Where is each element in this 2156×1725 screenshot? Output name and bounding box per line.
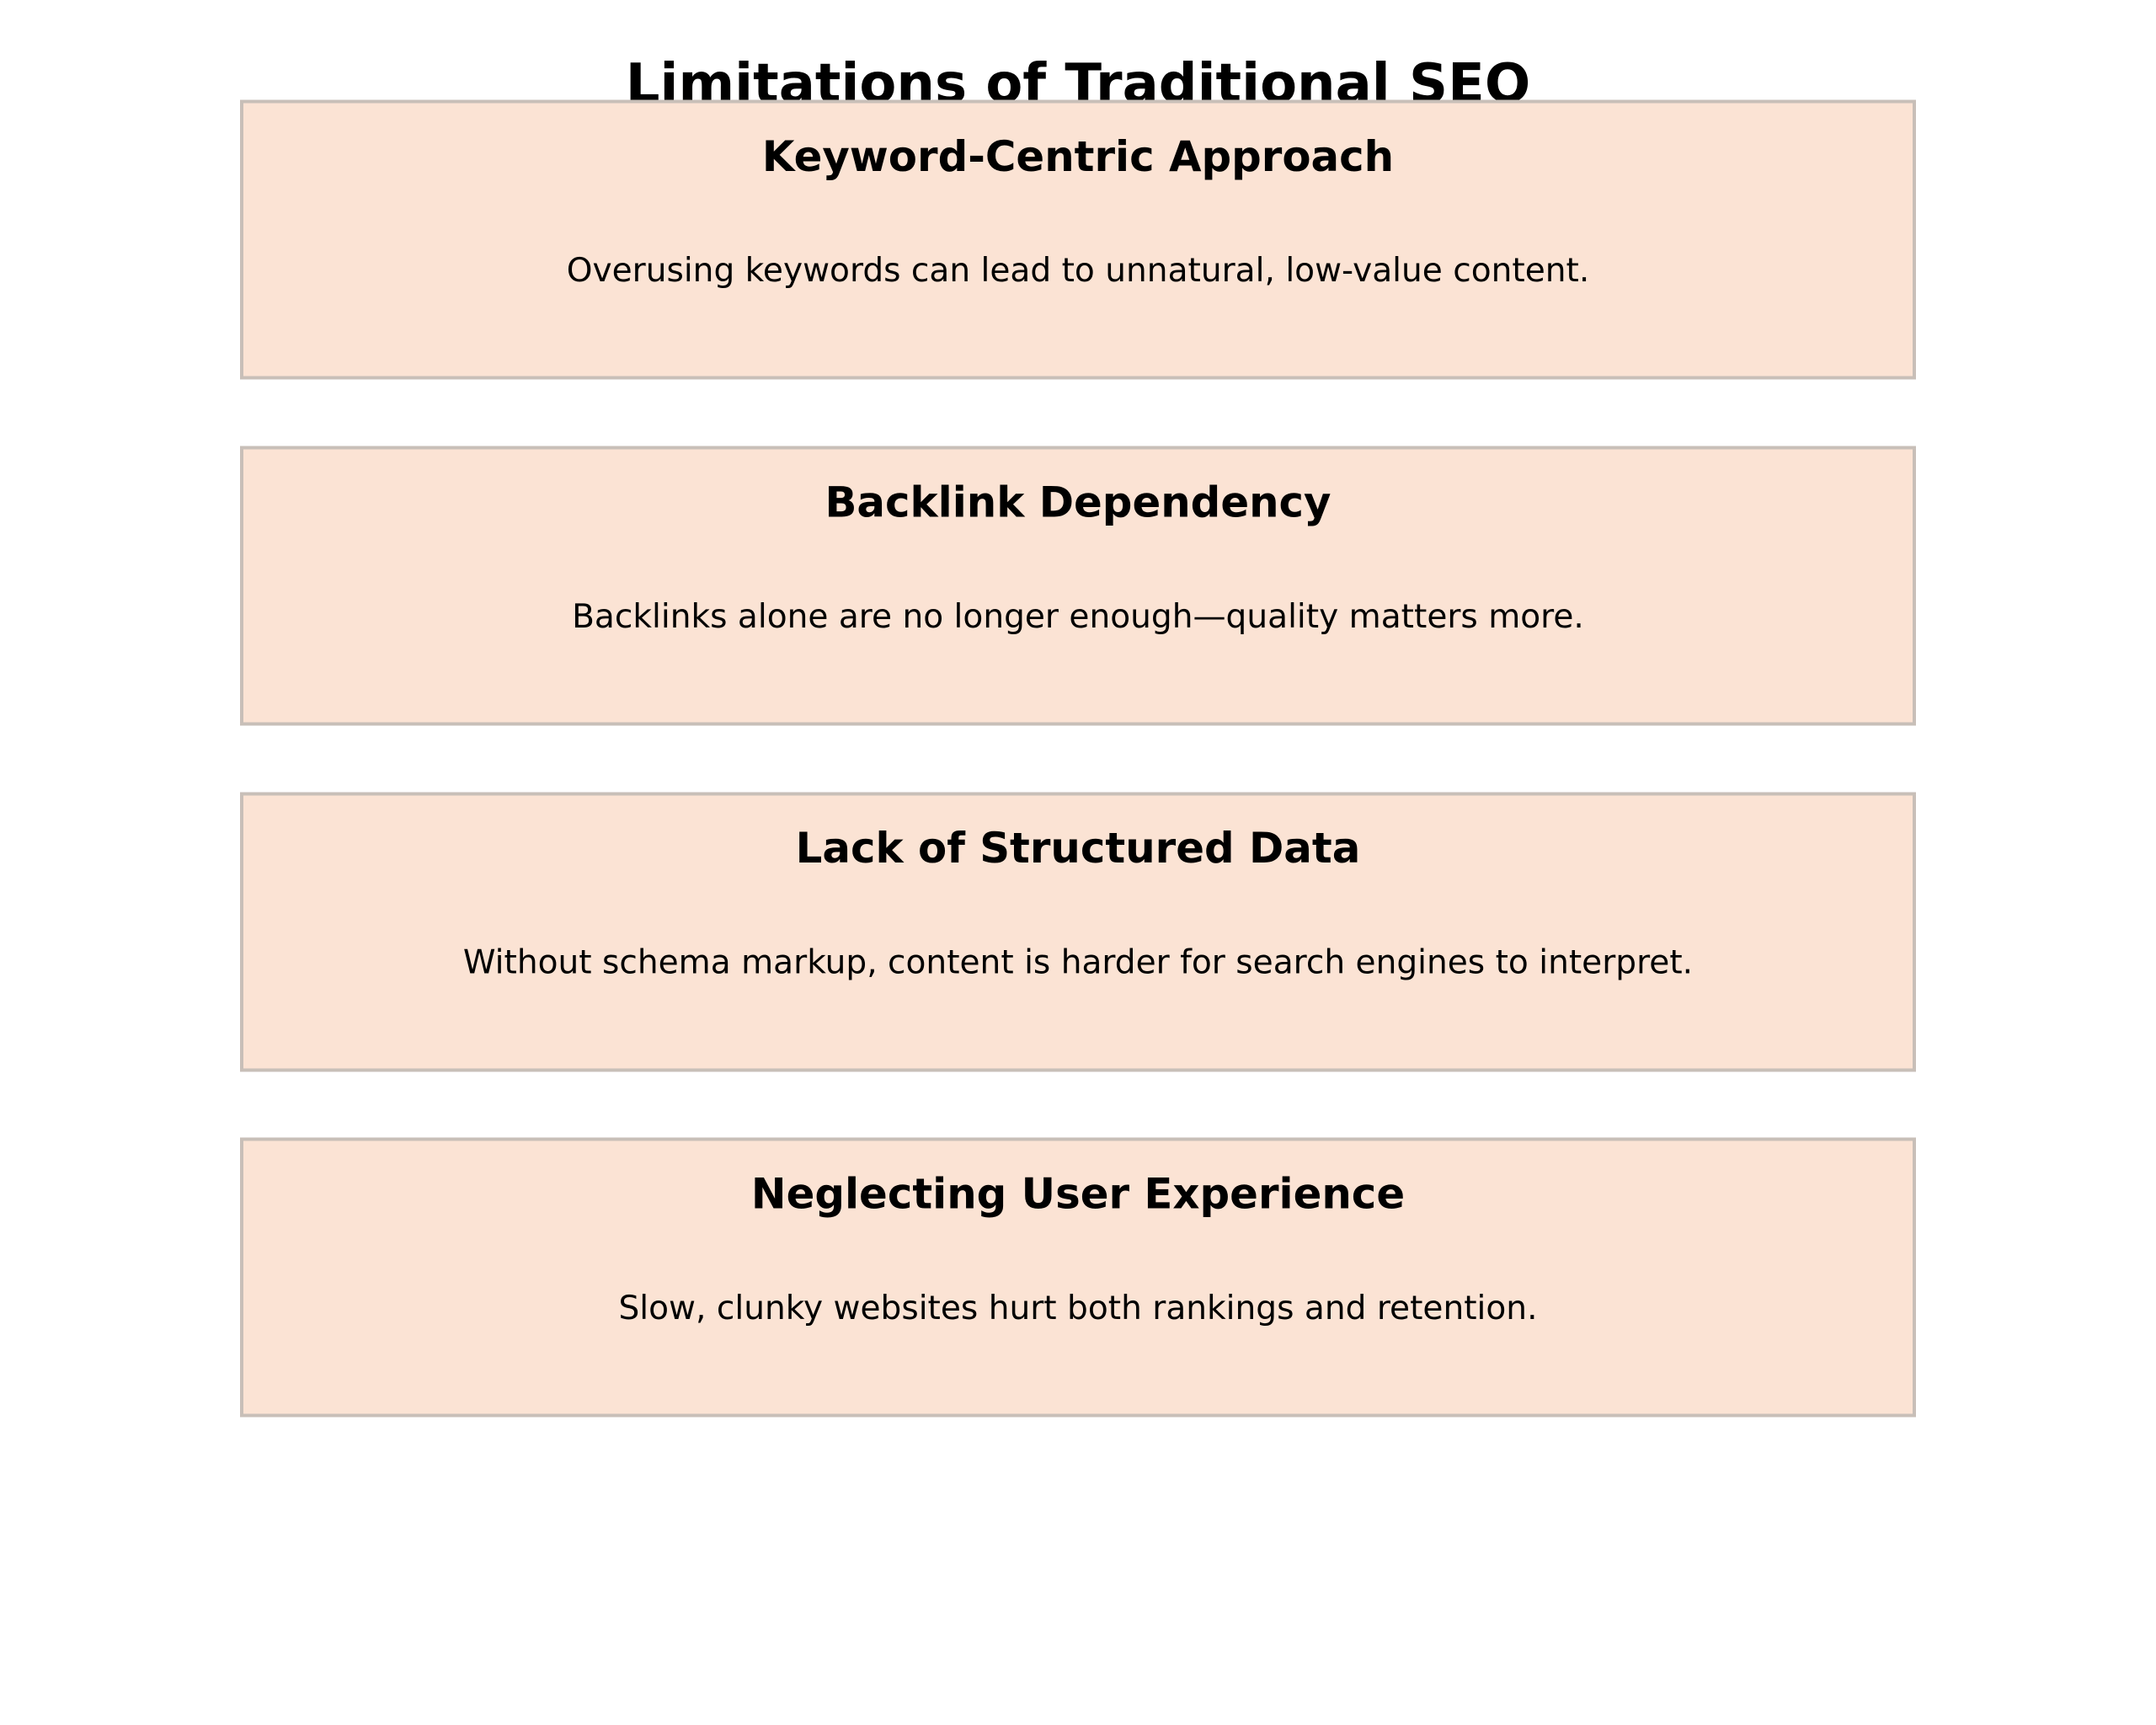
panel: backlink dependency (242, 448, 1914, 724)
text: user experience description: Slow, clunky websites hurt both rankings and retention. (618, 1290, 1538, 1327)
heading: backlink dependency: Backlink Dependency (825, 478, 1331, 527)
panel: neglecting user experience (242, 1139, 1914, 1415)
heading: neglecting user experience: Neglecting User Experience (751, 1169, 1405, 1218)
text: backlink description: Backlinks alone are no longer enough—quality matters more. (572, 598, 1584, 636)
heading: lack of structured data: Lack of Structured Data (796, 824, 1360, 873)
panel: lack of structured data (242, 793, 1914, 1070)
panel: keyword-centric approach (242, 101, 1914, 377)
title: Limitations of Traditional SEO (626, 53, 1530, 115)
text: structured data description: Without schema markup, content is harder for search engines to interpret. (463, 943, 1693, 982)
text: keyword-centric description: Overusing keywords can lead to unnatural, low-value content. (567, 252, 1589, 290)
heading: keyword-centric approach: Keyword-Centric Approach (762, 132, 1394, 181)
